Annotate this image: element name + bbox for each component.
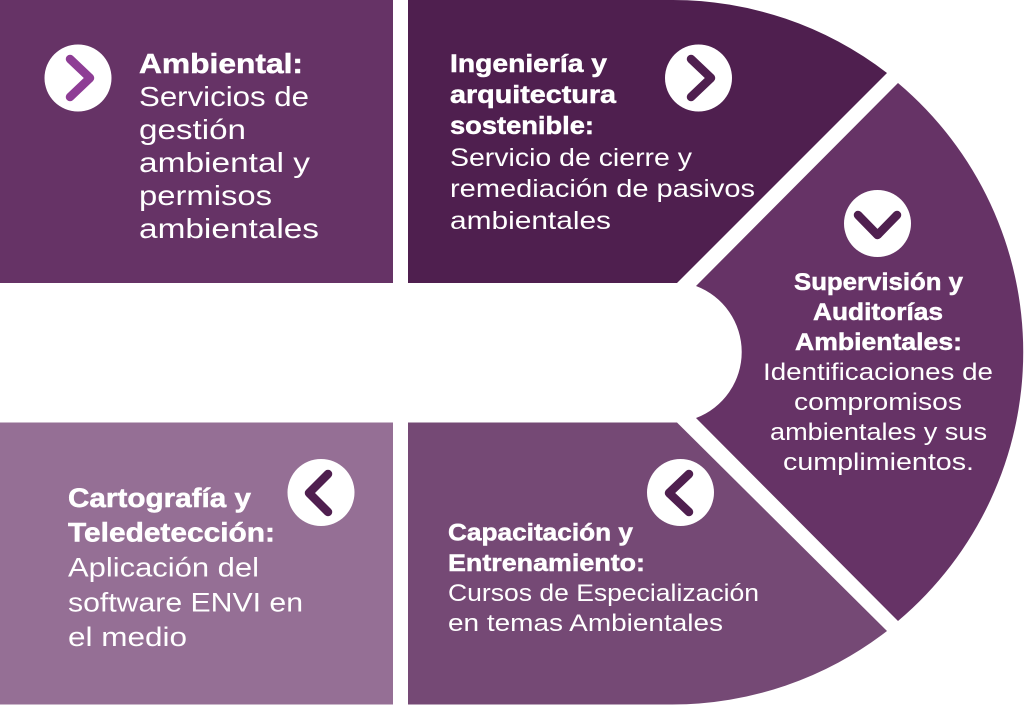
text: Ingeniería	[450, 50, 755, 235]
text: Capacitación: Cursos de Especialización	[448, 580, 759, 607]
text: Ambiental: gestión	[139, 114, 246, 145]
text: Cartografía: el medio	[68, 622, 187, 652]
text: Supervisión: Auditorías	[813, 299, 943, 326]
icon: left chevron Cartografía	[288, 459, 354, 526]
text: Cartografía: Teledetección:	[68, 518, 275, 548]
text: Capacitación: Entrenamiento:	[448, 550, 645, 577]
text: Supervisión: compromisos	[794, 389, 962, 416]
text: Supervisión: Identificaciones de	[763, 359, 993, 386]
text: Ambiental: ambiental y	[139, 147, 310, 178]
icon: right chevron Ingeniería	[665, 44, 732, 112]
panel: Capacitación y Entrenamiento	[408, 422, 887, 704]
text: Ambiental: Ambiental:	[139, 48, 303, 79]
text: Ingeniería: remediación de pasivos	[450, 175, 755, 203]
text: Ambiental: ambientales	[139, 213, 319, 244]
text: Ambiental	[139, 48, 319, 244]
panel: Supervisión y Auditorías Ambientales	[696, 83, 1023, 621]
text: Supervisión: Ambientales:	[795, 329, 962, 356]
text: Supervisión: ambientales y sus	[770, 419, 987, 446]
text: Cartografía: Cartografía y	[68, 483, 251, 513]
text: Supervisión: Supervisión y	[794, 269, 964, 296]
text: Cartografía	[68, 483, 303, 652]
icon: right chevron Ambiental	[44, 44, 112, 112]
text: Ingeniería: ambientales	[450, 207, 611, 235]
panel: Cartografía y Teledetección	[0, 422, 393, 704]
icon: left chevron Capacitación	[647, 459, 714, 526]
text: Ambiental: permisos	[139, 180, 272, 211]
text: Ingeniería: Ingeniería y	[450, 50, 607, 78]
text: Capacitación: en temas Ambientales	[448, 610, 723, 637]
text: Ingeniería: sostenible:	[450, 112, 594, 140]
icon: down chevron Supervisión	[844, 190, 911, 257]
text: Supervisión	[763, 269, 993, 476]
text: Capacitación: Capacitación y	[448, 520, 634, 546]
text: Cartografía: Aplicación del	[68, 552, 259, 582]
panel: Ingeniería y arquitectura sostenible	[408, 0, 887, 283]
panel: Ambiental	[0, 0, 393, 283]
text: Capacitación	[448, 520, 759, 637]
text: Ingeniería: arquitectura	[450, 81, 617, 109]
text: Supervisión: cumplimientos.	[783, 449, 974, 476]
text: Cartografía: software ENVI en	[68, 588, 303, 618]
text: Ambiental: Servicios de	[139, 81, 309, 112]
text: Ingeniería: Servicio de cierre y	[450, 144, 693, 172]
